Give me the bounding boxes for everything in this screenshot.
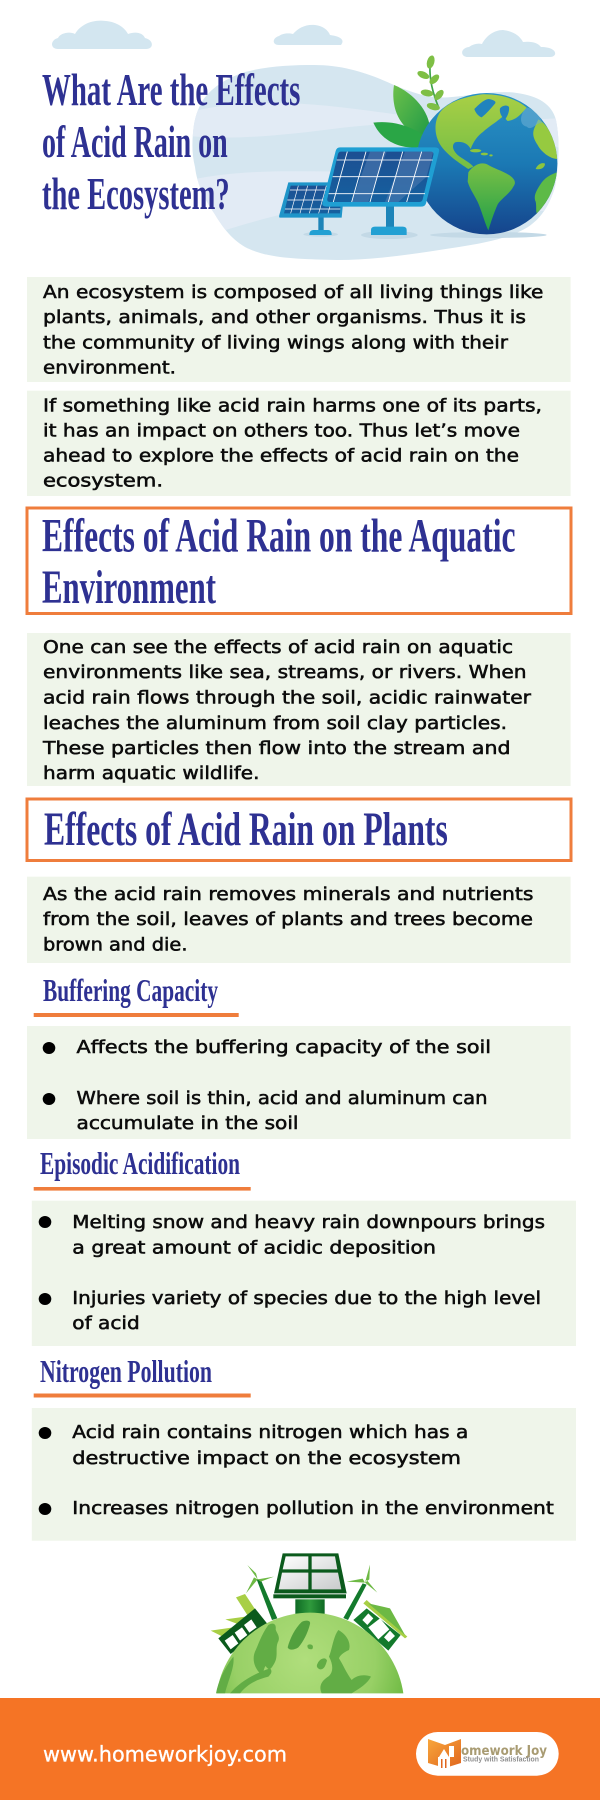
logo: Homework Joy: Study with Satisfaction (463, 1757, 539, 1764)
panel: acid rain impact intro (27, 391, 571, 496)
earth dome (216, 1612, 404, 1694)
panel: plant effects text: brown and die. (43, 935, 188, 956)
footer band (0, 1698, 600, 1800)
title: What Are the Effects (42, 64, 300, 115)
hero illustration: clouds, solar panels and globe (52, 21, 565, 265)
panel: aquatic effects text: acid rain flows through the soil, acidic rainwater (43, 688, 532, 709)
british isles (317, 1658, 327, 1669)
africa south (535, 172, 558, 213)
logo: Homework Joy: omework Joy (461, 1744, 547, 1759)
panel: ecosystem intro: the community of living wings along with their (43, 332, 509, 354)
right wind turbine (343, 1565, 377, 1620)
africa north (533, 119, 558, 159)
panel: episodic acidification bullets: Melting snow and heavy rain downpours brings (72, 1212, 545, 1233)
title: of Acid Rain on (42, 116, 228, 167)
title (42, 64, 300, 219)
panel: buffering capacity bullets: Where soil is thin, acid and aluminum can (76, 1088, 488, 1109)
panel: aquatic effects text: leaches the aluminum from soil clay particles. (43, 713, 507, 734)
small solar panel (279, 182, 345, 235)
subheading: nitrogen pollution: Nitrogen Pollution (40, 1353, 212, 1389)
panel: acid rain impact intro: If something like acid rain harms one of its parts, (43, 396, 542, 417)
panel: episodic acidification bullets: a great amount of acidic deposition (72, 1238, 436, 1259)
panel: aquatic effects text: harm aquatic wildlife. (43, 763, 260, 784)
earth (416, 93, 558, 234)
greenland (288, 1621, 310, 1650)
panel: acid rain impact intro: it has an impact on others too. Thus let’s move (43, 421, 520, 442)
panel: nitrogen pollution bullets: destructive impact on the ecosystem (72, 1448, 461, 1469)
panel: episodic acidification bullets: Injuries variety of species due to the high level (72, 1288, 541, 1309)
panel: aquatic effects text: One can see the effects of acid rain on aquatic (43, 637, 513, 658)
panel: buffering capacity bullets: accumulate in the soil (76, 1113, 298, 1134)
panel: ecosystem intro: plants, animals, and other organisms. Thus it is (43, 307, 526, 328)
icon: open book (428, 1739, 461, 1768)
cloud middle (274, 25, 343, 45)
madagascar and caribbean (470, 149, 545, 169)
ground shadows (303, 231, 547, 239)
subheading: episodic acidification: Episodic Acidification (40, 1145, 240, 1181)
panel: plant effects text: from the soil, leaves of plants and trees become (43, 909, 533, 930)
panel: nitrogen pollution bullets: Acid rain contains nitrogen which has a (72, 1422, 468, 1443)
panel: aquatic effects text: environments like sea, streams, or rivers. When (43, 662, 527, 683)
website url: www.homeworkjoy.com (43, 1742, 287, 1766)
panel: buffering capacity bullets: Affects the buffering capacity of the soil (76, 1037, 491, 1058)
south america (468, 163, 515, 230)
panel: ecosystem intro: environment. (43, 358, 176, 378)
title: the Ecosystem? (42, 168, 230, 219)
hudson bay (474, 99, 496, 117)
logo: Homework Joy (416, 1732, 559, 1776)
panel: aquatic effects text (27, 633, 571, 786)
panel: nitrogen pollution bullets (32, 1408, 576, 1541)
leaves (373, 55, 445, 148)
north america (435, 94, 527, 169)
house right (353, 1600, 407, 1651)
europe and asia (320, 1630, 371, 1693)
heading box: aquatic environment (27, 508, 571, 614)
north america landmass (254, 1624, 279, 1673)
panel: acid rain impact intro: ecosystem. (43, 471, 163, 492)
panel: aquatic effects text: These particles then flow into the stream and (42, 738, 510, 759)
subheading: nitrogen pollution (34, 1353, 251, 1398)
subheading: buffering capacity (34, 972, 239, 1017)
panel: episodic acidification bullets (32, 1201, 576, 1346)
cloud left (52, 21, 152, 49)
panel sheen (352, 152, 433, 202)
subheading: episodic acidification (34, 1145, 251, 1191)
panel: nitrogen pollution bullets: Increases nitrogen pollution in the environment (72, 1498, 554, 1519)
left wind turbine (246, 1565, 277, 1620)
panel: ecosystem intro: An ecosystem is composed of all living things like (43, 282, 543, 303)
large solar panel (322, 147, 439, 235)
iceland (307, 1644, 313, 1649)
panel: episodic acidification bullets: of acid (72, 1313, 140, 1334)
globe and panels group (279, 55, 558, 239)
green earth illustration with solar panel, turbines and buildings (210, 1553, 408, 1694)
heading box: aquatic environment: Environment (42, 561, 216, 614)
globe sheen (521, 108, 542, 128)
panel: acid rain impact intro: ahead to explore the effects of acid rain on the (43, 446, 519, 467)
panel: ecosystem intro (27, 277, 571, 382)
subheading: buffering capacity: Buffering Capacity (43, 972, 218, 1008)
background blob (190, 60, 565, 265)
solar panel (273, 1553, 347, 1614)
factory left (211, 1594, 268, 1654)
panel: buffering capacity bullets (27, 1026, 571, 1139)
panel: plant effects text: As the acid rain removes minerals and nutrients (43, 884, 534, 905)
cloud right (462, 30, 555, 57)
panel: plant effects text (27, 877, 571, 963)
